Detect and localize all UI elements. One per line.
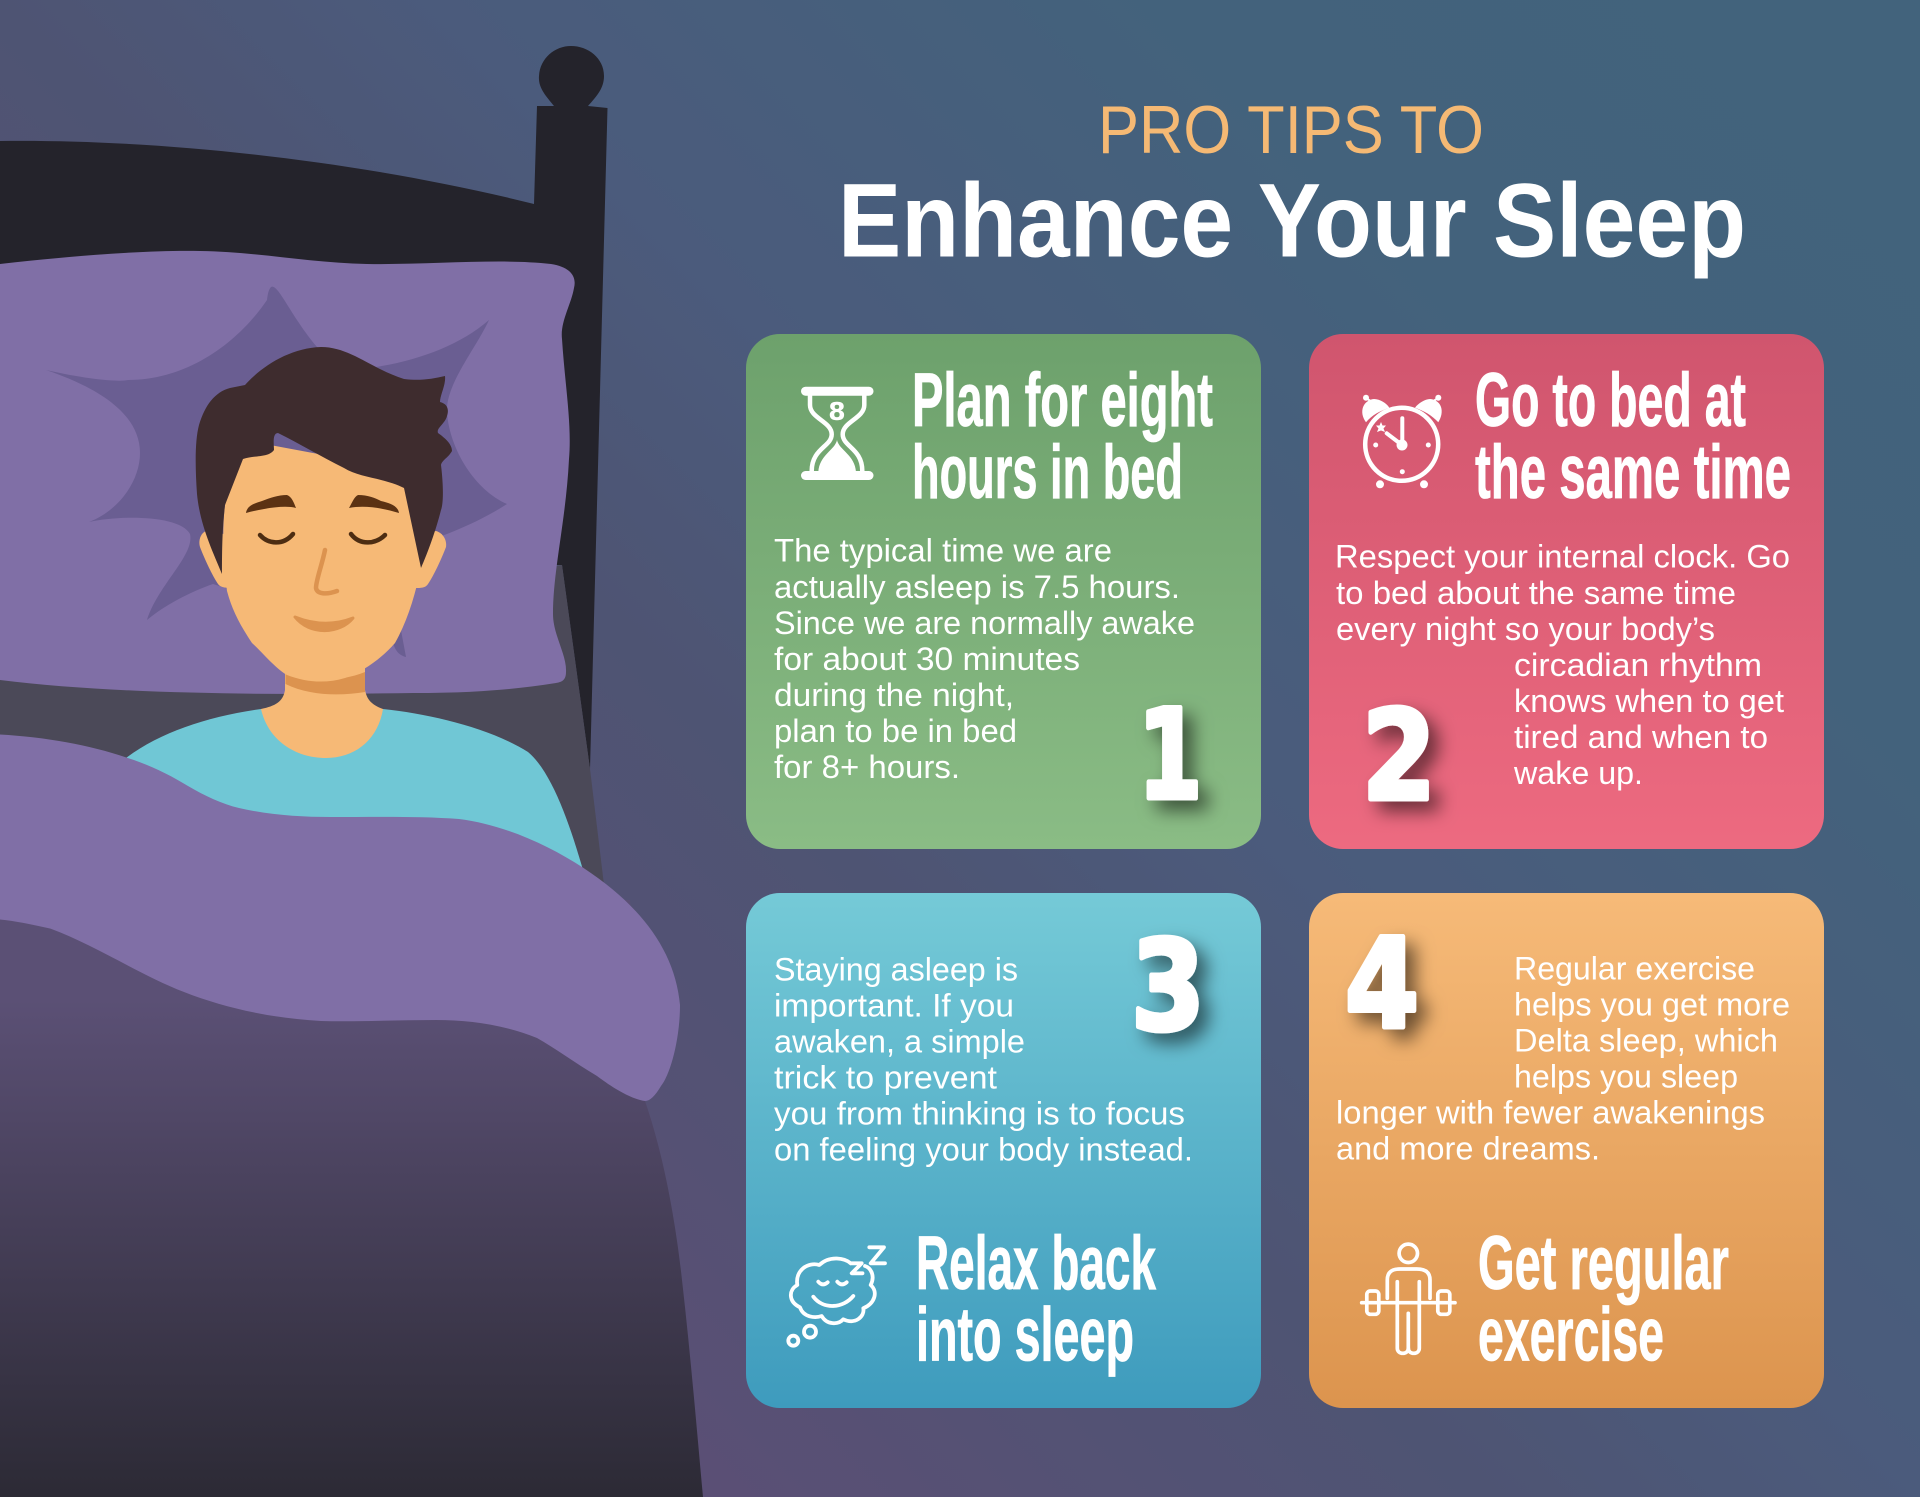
face bbox=[223, 440, 421, 682]
body text: knows when to get bbox=[1514, 683, 1784, 719]
icon: person lifting barbell bbox=[1362, 1244, 1455, 1353]
body text: to bed about the same time bbox=[1336, 575, 1736, 611]
body text bbox=[1335, 538, 1790, 791]
card background bbox=[746, 334, 1261, 849]
body text bbox=[774, 952, 1193, 1168]
mattress bbox=[0, 565, 604, 885]
body text: you from thinking is to focus bbox=[774, 1096, 1185, 1132]
eyebrows bbox=[246, 495, 399, 513]
card background bbox=[1309, 334, 1824, 849]
body text: every night so your body’s bbox=[1336, 611, 1715, 647]
heading bbox=[912, 358, 1213, 515]
neck bbox=[261, 665, 383, 758]
shirt bbox=[126, 709, 590, 900]
body text: important. If you bbox=[774, 988, 1014, 1024]
body text: trick to prevent bbox=[774, 1060, 997, 1096]
body text: circadian rhythm bbox=[1514, 647, 1762, 683]
body text bbox=[774, 532, 1195, 785]
heading bbox=[916, 1221, 1156, 1378]
body text: Delta sleep, which bbox=[1514, 1022, 1778, 1058]
number 4: 4 bbox=[1345, 913, 1419, 1057]
card background bbox=[1309, 893, 1824, 1408]
icon: sleeping cloud bbox=[788, 1247, 885, 1346]
icon: hourglass: 8 bbox=[828, 397, 846, 426]
body text: and more dreams. bbox=[1336, 1130, 1600, 1166]
nose bbox=[316, 550, 337, 593]
heading bbox=[1475, 358, 1791, 515]
closed eyes bbox=[260, 534, 385, 542]
heading: Relax back bbox=[916, 1221, 1156, 1306]
icon: alarm clock bbox=[1362, 395, 1442, 488]
illustration: man sleeping in bed bbox=[0, 46, 703, 1497]
icon: hourglass bbox=[801, 387, 874, 480]
title bbox=[838, 92, 1746, 280]
body text: tired and when to bbox=[1514, 719, 1768, 755]
body text: actually asleep is 7.5 hours. bbox=[774, 569, 1180, 605]
neck shadow bbox=[286, 672, 365, 694]
body text: longer with fewer awakenings bbox=[1336, 1094, 1765, 1130]
hair bbox=[196, 347, 452, 574]
bed cover bbox=[0, 900, 703, 1497]
body text: plan to be in bed bbox=[774, 713, 1017, 749]
body text: Since we are normally awake bbox=[774, 605, 1195, 641]
body text: Staying asleep is bbox=[774, 952, 1018, 988]
number 1: 1 bbox=[1138, 684, 1202, 828]
body text: awaken, a simple bbox=[774, 1024, 1025, 1060]
title kicker: PRO TIPS TO bbox=[1098, 92, 1484, 168]
body text: Respect your internal clock. Go bbox=[1335, 538, 1790, 574]
ears bbox=[199, 531, 446, 588]
pillow crease shadow bbox=[46, 287, 507, 657]
number 3: 3 bbox=[1131, 915, 1205, 1059]
body text: The typical time we are bbox=[774, 532, 1112, 568]
body text: for 8+ hours. bbox=[774, 749, 960, 785]
heading: into sleep bbox=[916, 1292, 1134, 1378]
body text: helps you get more bbox=[1514, 986, 1790, 1022]
body text: for about 30 minutes bbox=[774, 641, 1080, 677]
heading: Go to bed at bbox=[1475, 358, 1746, 443]
body text: Regular exercise bbox=[1514, 950, 1755, 986]
panel: tip 1 plan for eight hours bbox=[746, 334, 1261, 849]
body text: helps you sleep bbox=[1514, 1058, 1738, 1094]
panel: tip 2 same bedtime bbox=[1309, 334, 1824, 849]
heading bbox=[1478, 1221, 1729, 1378]
body text: wake up. bbox=[1513, 755, 1643, 791]
body text: on feeling your body instead. bbox=[774, 1132, 1193, 1168]
panel: tip 4 regular exercise bbox=[1309, 893, 1824, 1408]
panel: tip 3 relax back into sleep bbox=[746, 893, 1261, 1408]
number 2: 2 bbox=[1362, 685, 1436, 829]
heading: exercise bbox=[1478, 1292, 1664, 1378]
heading: Get regular bbox=[1478, 1221, 1729, 1306]
card background bbox=[746, 893, 1261, 1408]
blanket bbox=[0, 734, 680, 1101]
mouth bbox=[295, 617, 353, 631]
body text bbox=[1336, 950, 1790, 1166]
heading: hours in bed bbox=[912, 430, 1183, 515]
body text: during the night, bbox=[774, 677, 1014, 713]
main title: Enhance Your Sleep bbox=[838, 162, 1746, 280]
headboard and bedpost bbox=[0, 46, 608, 769]
heading: Plan for eight bbox=[912, 358, 1213, 443]
pillow bbox=[0, 251, 575, 694]
